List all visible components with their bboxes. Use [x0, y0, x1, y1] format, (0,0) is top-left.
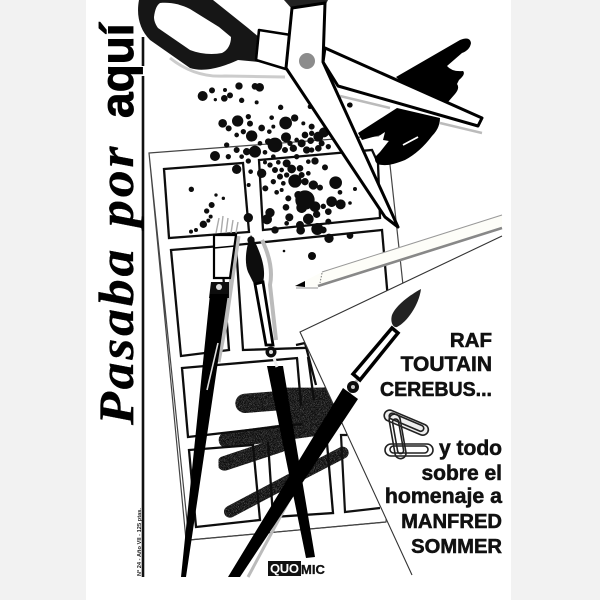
issue line: Nº 24 - Año VII - 125 ptas.: [137, 508, 143, 576]
title: Pasaba por: Pasaba: [90, 247, 145, 426]
comic page with panels: [149, 135, 403, 540]
ink splatter: [189, 83, 356, 243]
secondary text: homenaje a: [385, 484, 502, 508]
panel: top right: [259, 150, 380, 230]
top handle stub: [284, 0, 328, 9]
brush: flat: [181, 216, 238, 577]
ferrule clip: [209, 282, 229, 298]
publisher logo: MIC: [301, 562, 325, 577]
brush: round long: [228, 289, 421, 577]
lower ink blob: [358, 108, 440, 165]
secondary text: [385, 437, 502, 558]
pencil: [295, 215, 502, 288]
ink smudges: [225, 392, 343, 512]
headline list: [380, 329, 492, 401]
secondary text: y todo: [439, 437, 502, 460]
handle: [267, 366, 315, 558]
panel: lower wide: [182, 358, 302, 437]
bristles: [216, 216, 238, 233]
loose white paper sheet: [189, 236, 511, 576]
handle: [181, 294, 228, 577]
brush tip: [246, 235, 264, 284]
title: por: [90, 144, 145, 231]
panel: bottom left: [189, 445, 260, 527]
brush: round centre: [246, 235, 315, 558]
blade: long right: [323, 48, 482, 126]
handle: finger loop: [138, 0, 260, 70]
upper ink wing: [396, 39, 471, 102]
handle: [228, 388, 358, 577]
handle connector: [256, 30, 291, 70]
panel: top left: [164, 163, 249, 238]
cover sheet: [86, 0, 511, 600]
extra droplets on the lower page: [283, 103, 352, 260]
spine rule: [142, 37, 144, 577]
secondary text: SOMMER: [411, 536, 502, 558]
publisher logo: [268, 561, 325, 577]
secondary text: MANFRED: [401, 511, 502, 533]
publisher logo: QUO: [270, 561, 299, 576]
pencil tip: [295, 281, 305, 287]
secondary text: sobre el: [421, 462, 502, 485]
headline list: TOUTAIN: [401, 353, 492, 376]
pivot screw: [299, 53, 315, 69]
panel: lower strip: [296, 343, 316, 405]
title: [90, 21, 145, 426]
ferrule: [255, 282, 273, 345]
ferrule: [353, 328, 398, 380]
headline list: RAF: [450, 329, 492, 352]
panel: middle left: [171, 246, 229, 356]
panel: bottom middle: [268, 442, 333, 517]
scissors: [138, 0, 482, 227]
grey drop shadow: [170, 58, 285, 77]
title: aquí: aquí: [91, 21, 143, 118]
white highlight in blob: [403, 137, 418, 145]
headline list: CEREBUS...: [380, 379, 492, 401]
brush tip: [391, 289, 421, 327]
outer page outline: [149, 135, 403, 540]
black ink shadow of scissors: [358, 39, 471, 165]
blade: long down: [286, 3, 398, 227]
panel: middle right: [236, 230, 392, 350]
paper clips icon: [382, 408, 433, 460]
